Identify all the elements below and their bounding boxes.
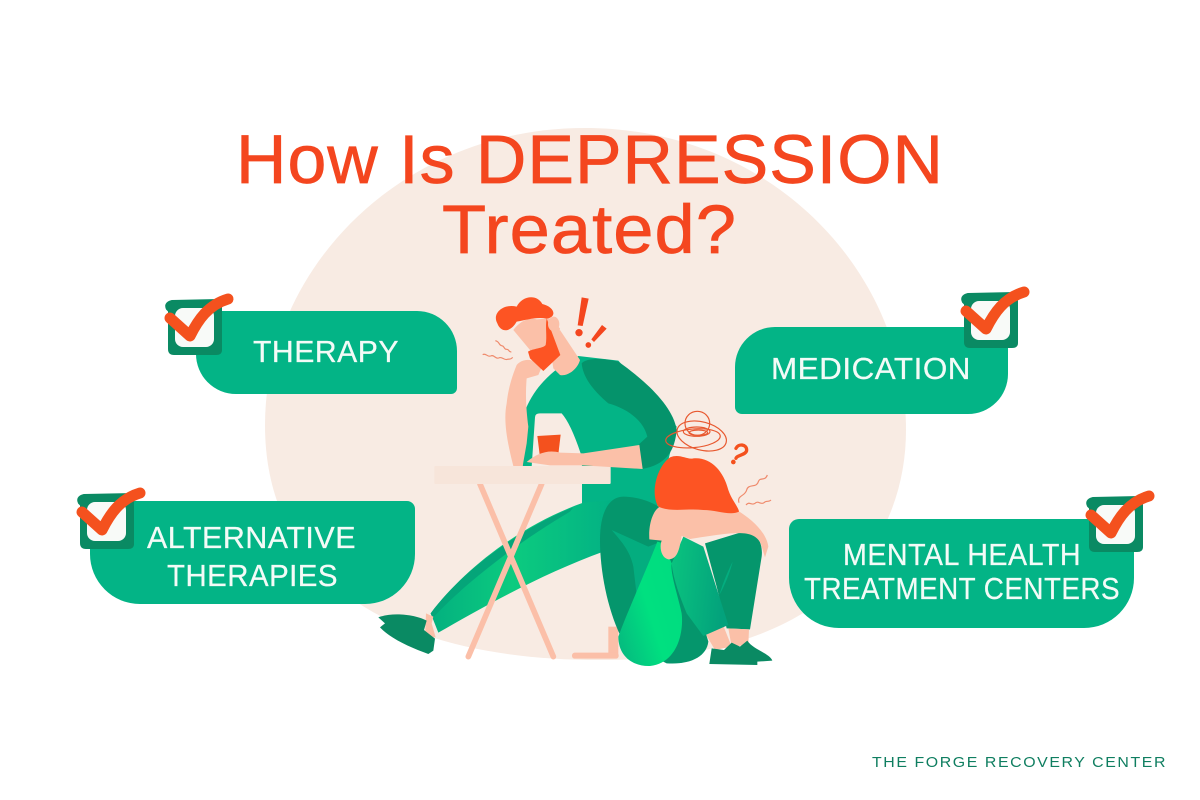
man sleeve bbox=[582, 359, 677, 469]
label: alternative therapies: THERAPIES bbox=[167, 559, 338, 593]
man face bbox=[513, 318, 560, 367]
table bbox=[434, 466, 619, 659]
stress squiggles right bbox=[739, 475, 771, 505]
man torso bbox=[523, 356, 677, 510]
woman inner thigh bbox=[612, 530, 657, 595]
woman arms bbox=[649, 507, 768, 559]
woman near leg bbox=[618, 542, 682, 666]
woman hair bbox=[655, 456, 739, 513]
card: alternative therapies bbox=[90, 501, 415, 604]
check icon: mental health treatment centers bbox=[1087, 496, 1149, 551]
woman middle leg bbox=[672, 537, 728, 636]
question mark bbox=[731, 445, 747, 464]
woman far leg bbox=[705, 532, 762, 629]
man ear bbox=[548, 317, 559, 331]
check icon: alternative therapies bbox=[78, 493, 140, 548]
man shoe bbox=[378, 613, 436, 654]
man back leg bbox=[431, 500, 613, 633]
label: alternative therapies bbox=[147, 521, 356, 593]
check icon: therapy bbox=[166, 299, 228, 354]
check icon: medication bbox=[962, 292, 1024, 347]
drink bbox=[537, 435, 561, 463]
title: How Is DEPRESSION bbox=[236, 121, 944, 198]
title: Treated? bbox=[442, 191, 737, 268]
card: mental health treatment centers bbox=[789, 519, 1134, 628]
background blob bbox=[265, 128, 906, 660]
man arm holding head bbox=[505, 360, 542, 466]
stress squiggles left bbox=[483, 341, 513, 360]
man forearm bbox=[527, 445, 643, 469]
footer credit: THE FORGE RECOVERY CENTER bbox=[872, 754, 1167, 771]
man beard bbox=[528, 318, 560, 371]
label: alternative therapies: ALTERNATIVE bbox=[147, 521, 356, 555]
illustration: two people at a table bbox=[378, 297, 772, 666]
man neck bbox=[550, 330, 580, 375]
woman feet bbox=[703, 626, 772, 665]
label: mental health treatment centers: TREATMENT CENTERS bbox=[804, 572, 1120, 606]
exclamation marks bbox=[575, 297, 607, 348]
card: therapy bbox=[196, 311, 457, 394]
scribble above head bbox=[665, 411, 730, 456]
label: mental health treatment centers: MENTAL HEALTH bbox=[843, 538, 1081, 572]
title bbox=[236, 121, 944, 268]
label: medication: MEDICATION bbox=[771, 352, 971, 386]
woman body bbox=[600, 497, 708, 664]
card: medication bbox=[735, 327, 1008, 414]
man hair bbox=[496, 297, 553, 330]
label: mental health treatment centers bbox=[804, 538, 1120, 606]
label: therapy: THERAPY bbox=[253, 335, 399, 369]
